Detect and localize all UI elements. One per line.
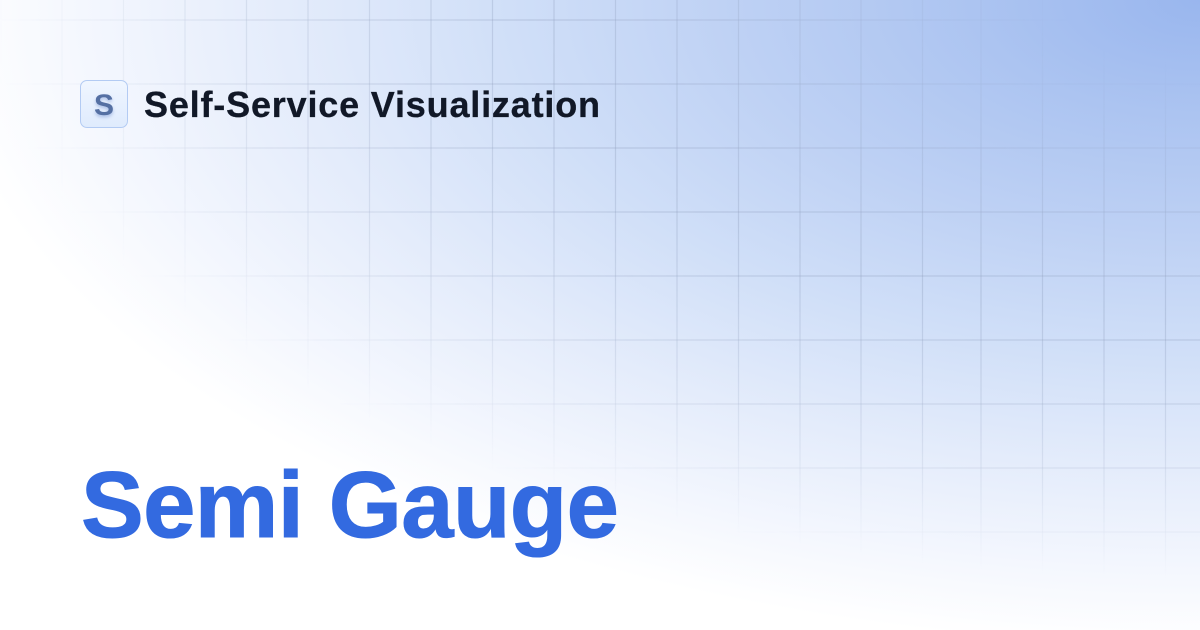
heading: brand name: Self-Service Visualization (144, 84, 601, 125)
title: Semi Gauge (81, 452, 618, 557)
icon: logo badge (80, 80, 128, 128)
icon: logo badge: S (94, 89, 114, 122)
